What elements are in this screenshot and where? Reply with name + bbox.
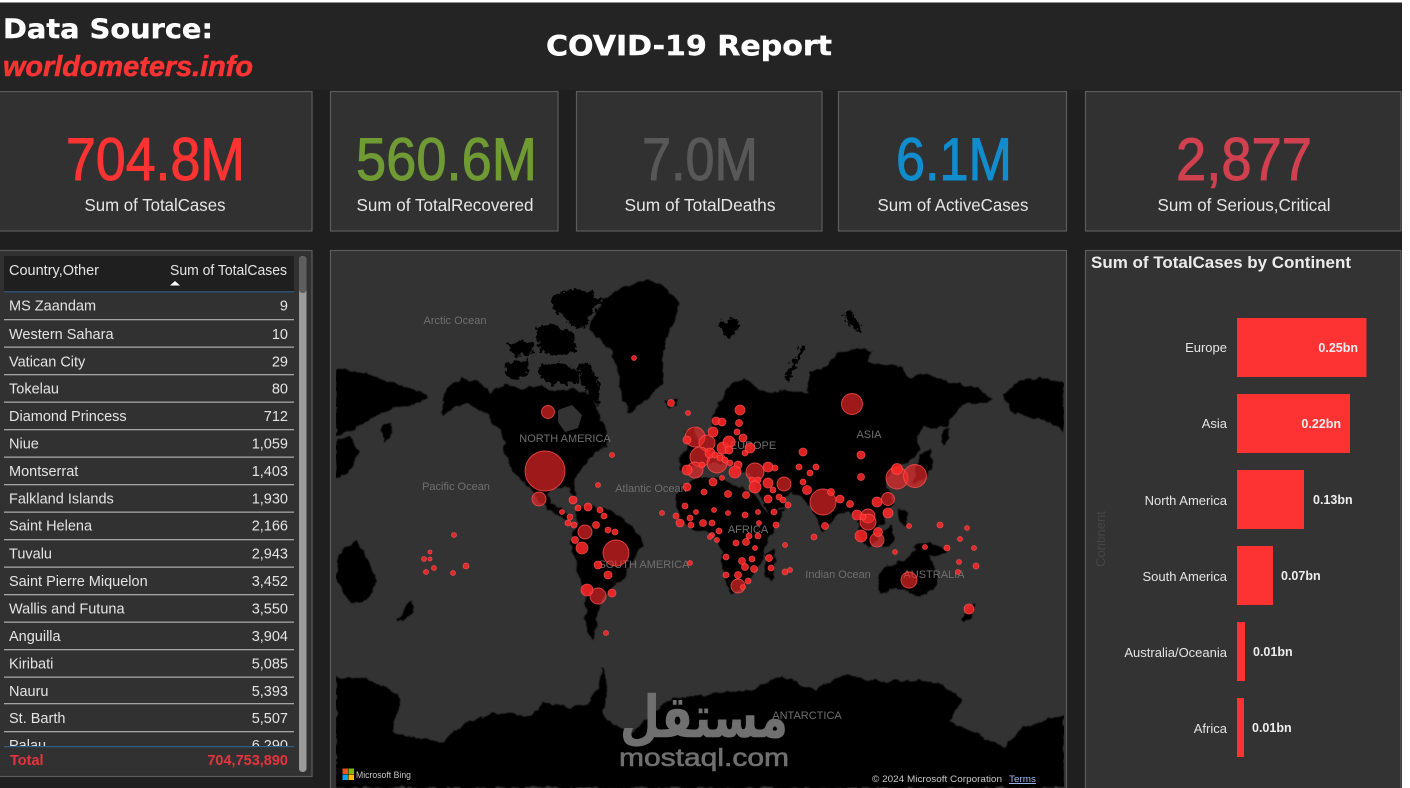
table rows: Western Sahara xyxy=(9,327,114,343)
map place labels: Atlantic Ocean xyxy=(615,483,687,495)
table header: Sum of TotalCases xyxy=(170,263,287,279)
KPI card: active cases: Sum of ActiveCases xyxy=(878,195,1029,215)
table rows: Nauru xyxy=(9,684,48,700)
watermark: mostaql: mostaql.com xyxy=(619,744,789,772)
KPI card: total recovered: 560.6M xyxy=(356,126,537,193)
map land masses xyxy=(336,280,1064,788)
map place labels: SOUTH AMERICA xyxy=(598,559,690,571)
table header: Country,Other xyxy=(9,263,99,279)
table rows: 2,943 xyxy=(252,546,288,562)
bar: North America: 0.13bn xyxy=(1313,493,1353,507)
map place labels: ANTARCTICA xyxy=(772,710,842,722)
watermark: mostaql: مستقل xyxy=(620,683,788,751)
map arctic islands xyxy=(505,288,862,406)
map small case bubbles xyxy=(422,356,979,636)
map place labels: ASIA xyxy=(856,429,882,441)
map place labels: NORTH AMERICA xyxy=(519,433,611,445)
map large case bubbles xyxy=(525,394,926,604)
KPI card: serious critical: 2,877 xyxy=(1176,126,1312,193)
table rows: Kiribati xyxy=(9,656,53,672)
bar: South America: 0.07bn xyxy=(1281,569,1321,583)
map place labels: Arctic Ocean xyxy=(424,315,486,327)
table rows: St. Barth xyxy=(9,711,65,727)
axis title: Continent xyxy=(1093,511,1108,567)
KPI card: active cases xyxy=(838,92,1066,231)
bar: North America: North America xyxy=(1145,493,1228,508)
table rows: 712 xyxy=(264,409,288,425)
table rows: 29 xyxy=(272,354,288,370)
table rows: Saint Helena xyxy=(9,518,93,534)
heading: data source: Data Source: xyxy=(3,14,213,45)
table rows: 1,930 xyxy=(252,492,288,508)
KPI card: total recovered xyxy=(330,92,558,231)
table rows: 9 xyxy=(280,298,288,314)
bar: South America: South America xyxy=(1142,569,1228,584)
KPI card: total cases xyxy=(0,92,312,231)
table total row: Total xyxy=(10,753,44,769)
KPI card: serious critical: Sum of Serious,Critical xyxy=(1158,195,1330,215)
table rows: Vatican City xyxy=(9,354,86,370)
copyright attribution: © 2024 Microsoft Corporation xyxy=(872,774,1002,785)
bar: Europe: 0.25bn xyxy=(1318,341,1358,355)
icon: microsoft logo xyxy=(342,768,354,780)
panel: world map xyxy=(330,250,1066,788)
bar: Africa: 0.01bn xyxy=(1252,721,1292,735)
map hudson bay xyxy=(558,405,582,432)
KPI card: active cases: 6.1M xyxy=(896,126,1012,193)
title: COVID-19 Report xyxy=(546,29,832,62)
table rows: Montserrat xyxy=(9,464,78,480)
bar: Australia/Oceania: 0.01bn xyxy=(1253,645,1293,659)
table rows: Diamond Princess xyxy=(9,409,127,425)
table rows: 5,085 xyxy=(252,656,288,672)
heading: worldometers link: worldometers.info xyxy=(3,51,253,83)
bar: Europe: Europe xyxy=(1185,340,1227,355)
table rows: Tuvalu xyxy=(9,546,52,562)
bar: Asia: Asia xyxy=(1202,416,1228,431)
table rows: Saint Pierre Miquelon xyxy=(9,574,148,590)
KPI card: total cases: 704.8M xyxy=(66,126,245,193)
table rows: 1,403 xyxy=(252,464,288,480)
table rows: 80 xyxy=(272,382,288,398)
header band xyxy=(0,3,1402,90)
map place labels: Pacific Ocean xyxy=(422,481,490,493)
bing attribution: Microsoft Bing xyxy=(356,770,411,781)
panel: country table xyxy=(0,250,312,776)
table rows: 10 xyxy=(272,327,288,343)
bar: Australia/Oceania: Australia/Oceania xyxy=(1124,645,1228,660)
map place labels: AUSTRALIA xyxy=(903,569,965,581)
table total row xyxy=(4,746,294,769)
KPI card: total deaths xyxy=(576,92,822,231)
KPI card: total cases: Sum of TotalCases xyxy=(84,195,226,215)
map place labels: Indian Ocean xyxy=(805,569,871,581)
bar: North America xyxy=(1145,470,1353,529)
KPI card: total recovered: Sum of TotalRecovered xyxy=(356,195,534,215)
map place labels xyxy=(422,315,965,722)
copyright attribution: Terms xyxy=(1009,774,1036,785)
map place labels: EUROPE xyxy=(730,440,776,452)
bar: Africa: Africa xyxy=(1194,721,1228,736)
table rows: 1,059 xyxy=(252,436,288,452)
map place labels: AFRICA xyxy=(728,524,769,536)
table rows: 3,904 xyxy=(252,629,288,645)
table header xyxy=(4,256,294,292)
table scrollbar xyxy=(299,256,306,772)
table rows: Anguilla xyxy=(9,629,62,645)
bar: Africa xyxy=(1194,698,1292,757)
bar: Australia/Oceania xyxy=(1124,622,1293,681)
chart title: Sum of TotalCases by Continent xyxy=(1091,254,1352,272)
bar: Asia: 0.22bn xyxy=(1301,417,1341,431)
table rows: 2,166 xyxy=(252,518,288,534)
table rows: 3,452 xyxy=(252,574,288,590)
panel: bar chart by continent xyxy=(1086,250,1401,788)
bar: Asia xyxy=(1202,394,1350,453)
KPI card: serious critical xyxy=(1086,92,1401,231)
table total row: 704,753,890 xyxy=(207,753,288,769)
table rows xyxy=(4,298,294,754)
table rows: 5,393 xyxy=(252,684,288,700)
table rows: Palau xyxy=(9,738,46,754)
table rows: Tokelau xyxy=(9,382,59,398)
watermark: mostaql xyxy=(619,683,789,772)
table rows: MS Zaandam xyxy=(9,298,96,314)
KPI card: total deaths: Sum of TotalDeaths xyxy=(624,195,776,215)
table rows: Wallis and Futuna xyxy=(9,602,125,618)
table rows: Falkland Islands xyxy=(9,492,114,508)
table rows: 6,290 xyxy=(252,738,288,754)
table rows: Niue xyxy=(9,436,39,452)
bar: Europe xyxy=(1185,318,1366,377)
KPI card: total deaths: 7.0M xyxy=(642,126,758,193)
table rows: 3,550 xyxy=(252,602,288,618)
bar: South America xyxy=(1142,546,1321,605)
table rows: 5,507 xyxy=(252,711,288,727)
